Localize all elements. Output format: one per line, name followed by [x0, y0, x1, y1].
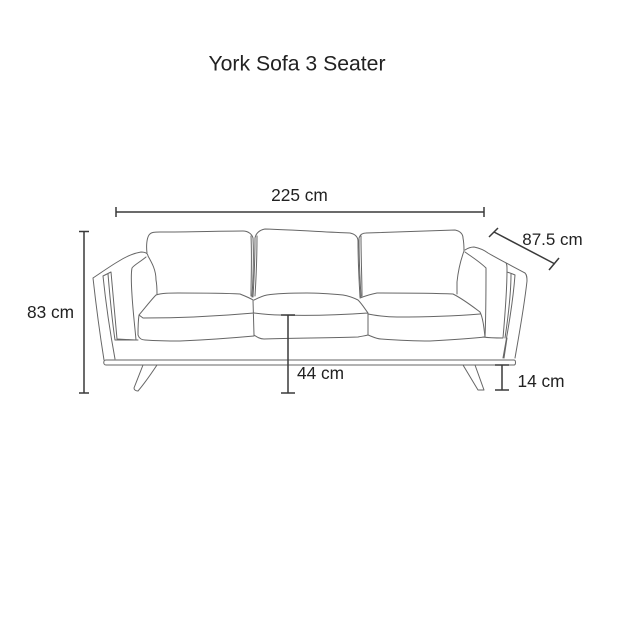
seat height dimension line [281, 315, 295, 393]
middle seat cushion [254, 293, 368, 339]
right leg [463, 365, 484, 390]
title: York Sofa 3 Seater [208, 52, 386, 76]
left leg [134, 365, 157, 391]
left arm [93, 252, 157, 360]
left seat cushion [138, 293, 254, 341]
right arm [465, 247, 527, 358]
right back cushion [359, 230, 464, 297]
dimension lines [79, 207, 559, 393]
depth dimension line [489, 228, 559, 270]
middle back cushion [253, 229, 360, 297]
sofa line drawing [93, 229, 527, 391]
leg height dimension line [495, 365, 509, 390]
height label: 83 cm [27, 302, 74, 322]
leg height label: 14 cm [517, 371, 565, 391]
depth label: 87.5 cm [522, 230, 583, 249]
width label: 225 cm [271, 185, 328, 205]
height dimension line [79, 232, 89, 393]
width dimension line [116, 207, 484, 217]
left back cushion [147, 231, 253, 297]
right seat cushion [360, 293, 485, 341]
seat height label: 44 cm [297, 363, 344, 383]
base rail [104, 360, 516, 365]
